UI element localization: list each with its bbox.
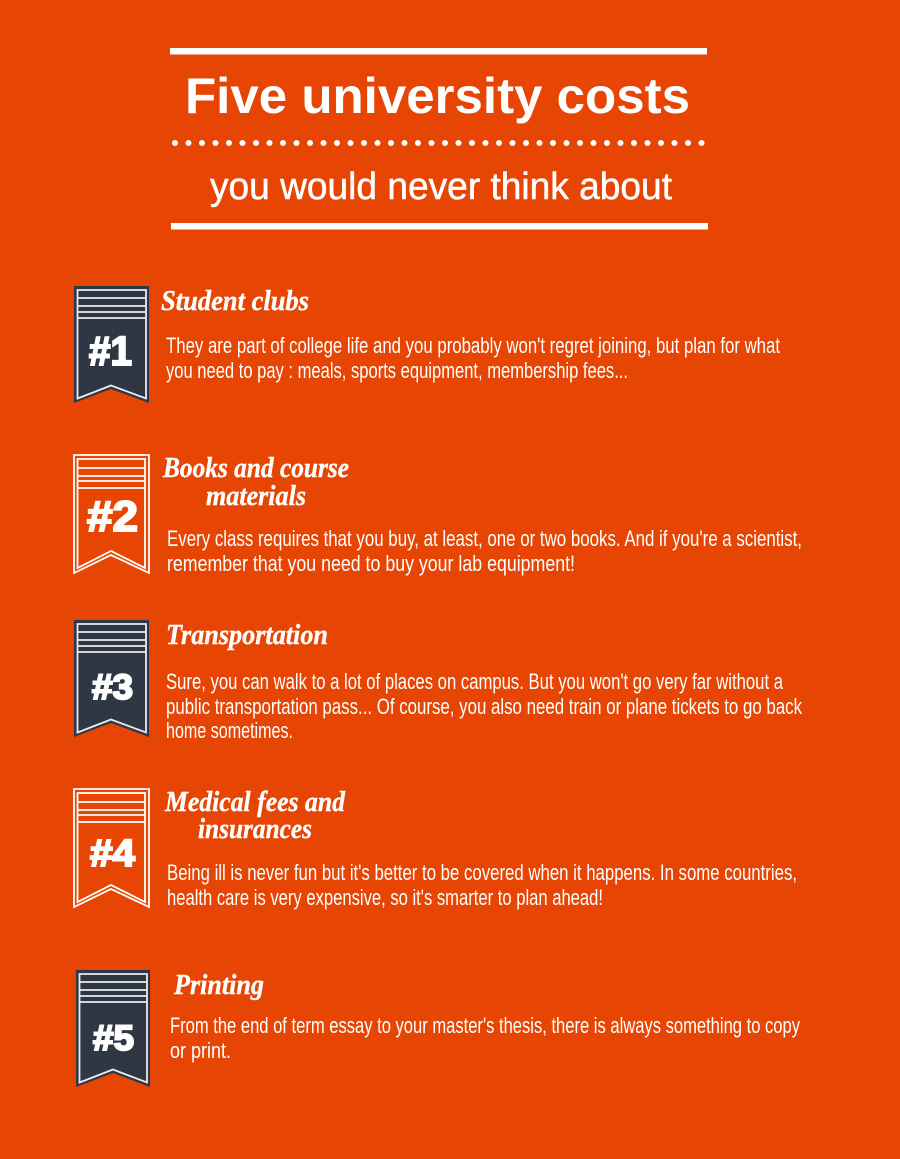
heading — [164, 786, 345, 845]
description: or print. — [170, 1038, 231, 1063]
item 2: books and course materials — [74, 452, 802, 576]
description: remember that you need to buy your lab equipment! — [167, 551, 575, 576]
heading — [162, 452, 349, 512]
dotted divider — [175, 140, 706, 146]
description — [167, 526, 802, 576]
header block — [170, 48, 708, 230]
ribbon badge #2 — [74, 455, 149, 573]
heading: Transportation — [166, 619, 328, 651]
description — [166, 333, 780, 383]
description — [170, 1013, 800, 1063]
heading: Printing — [173, 969, 264, 1001]
ribbon badge #3: #3 — [92, 668, 133, 707]
description: you need to pay : meals, sports equipment, membership fees... — [166, 358, 628, 383]
heading: Medical fees and — [164, 786, 345, 818]
item 1: student clubs — [74, 285, 780, 403]
description — [167, 860, 797, 910]
title: Five university costs — [185, 68, 690, 124]
heading: insurances — [198, 813, 312, 845]
item 3: transportation — [74, 619, 803, 743]
heading: Student clubs — [161, 285, 309, 317]
description: home sometimes. — [166, 718, 293, 743]
ribbon badge #3 — [74, 620, 149, 737]
ribbon badge #5: #5 — [93, 1019, 134, 1058]
description — [166, 669, 803, 743]
ribbon badge #5 — [76, 970, 150, 1087]
description: health care is very expensive, so it's smarter to plan ahead! — [167, 885, 603, 910]
ribbon badge #1: #1 — [89, 328, 132, 374]
ribbon badge #4 — [74, 789, 149, 907]
ribbon badge #4: #4 — [90, 833, 135, 875]
ribbon badge #1 — [74, 286, 149, 403]
item 5: printing — [76, 969, 800, 1087]
heading: materials — [206, 480, 306, 512]
item 4: medical fees and insurances — [74, 786, 797, 910]
heading: Books and course — [162, 452, 349, 484]
ribbon badge #2: #2 — [87, 493, 138, 541]
subtitle: you would never think about — [210, 166, 672, 208]
